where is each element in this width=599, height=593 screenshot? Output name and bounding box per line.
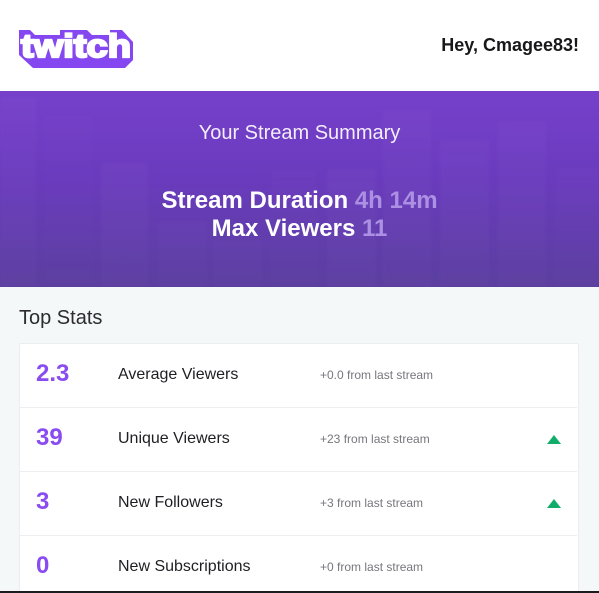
row: unique viewers: 39 [36, 424, 63, 451]
stats section [0, 287, 599, 591]
background bar chart [0, 91, 599, 287]
row: new subscriptions: 0 [36, 552, 49, 579]
hero panel: stream summary [0, 91, 599, 287]
row: unique viewers [20, 424, 577, 472]
panel: top stats table [19, 343, 579, 593]
row: new subscriptions: New Subscriptions [118, 558, 250, 575]
row: average viewers: Average Viewers [118, 366, 238, 383]
row: average viewers [20, 360, 577, 408]
logo: twitch: twitch [21, 28, 131, 64]
icon: up arrow [547, 499, 561, 508]
row: unique viewers: +23 from last stream [320, 432, 430, 446]
section heading: Top Stats [19, 307, 102, 329]
row: new subscriptions [36, 552, 423, 579]
row: new followers: 3 [36, 488, 49, 515]
row: new followers: New Followers [118, 494, 223, 511]
row: new followers [20, 488, 577, 536]
hero heading: Your Stream Summary [199, 122, 400, 144]
row: average viewers: +0.0 from last stream [320, 368, 433, 382]
icon: up arrow [547, 435, 561, 444]
stream duration: Stream Duration 4h 14m [161, 187, 438, 214]
header [0, 0, 599, 91]
row: new followers: +3 from last stream [320, 496, 423, 510]
row: unique viewers: Unique Viewers [118, 430, 230, 447]
row: new subscriptions: +0 from last stream [320, 560, 423, 574]
max viewers: Max Viewers 11 [212, 215, 387, 242]
bottom edge line [0, 591, 599, 593]
greeting: Hey, Cmagee83! [441, 35, 579, 55]
row: average viewers: 2.3 [36, 360, 69, 387]
